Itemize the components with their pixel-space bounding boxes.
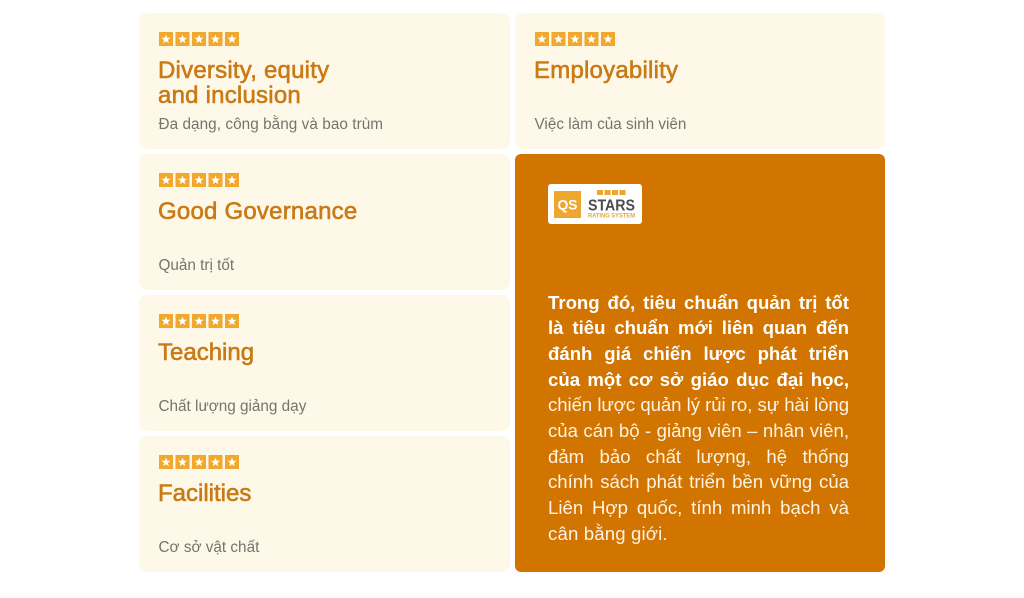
icon: five star rating bbox=[159, 314, 239, 328]
heading: and inclusion bbox=[158, 82, 301, 109]
text block: explanation paragraph: Trong đó, tiêu chuẩn quản trị tốt bbox=[548, 292, 849, 312]
text block: explanation paragraph: của cán bộ - giảng viên – nhân viên, bbox=[548, 420, 849, 441]
subtitle: Cơ sở vật chất bbox=[158, 539, 259, 556]
heading: Employability bbox=[534, 57, 678, 84]
icon: five star rating bbox=[159, 32, 239, 46]
icon: five star rating bbox=[535, 32, 615, 46]
logo: QS Stars Rating System: STARS bbox=[588, 198, 635, 214]
subtitle: Đa dạng, công bằng và bao trùm bbox=[158, 116, 383, 133]
heading: Teaching bbox=[158, 339, 254, 366]
panel: Diversity, equity and inclusion bbox=[139, 13, 510, 149]
panel: QS Stars explanation bbox=[515, 154, 885, 572]
panel: Employability bbox=[515, 13, 885, 149]
heading: Facilities bbox=[158, 480, 251, 507]
logo: QS Stars Rating System: RATING SYSTEM bbox=[588, 212, 635, 220]
text block: explanation paragraph: Liên Hợp quốc, tính minh bạch và bbox=[548, 497, 849, 518]
panel: Facilities bbox=[139, 436, 510, 572]
subtitle: Việc làm của sinh viên bbox=[534, 116, 686, 133]
icon: five star rating bbox=[159, 455, 239, 469]
subtitle: Quản trị tốt bbox=[158, 257, 234, 274]
heading: Good Governance bbox=[158, 198, 357, 225]
text block: explanation paragraph: của một cơ sở giáo dục đại học, bbox=[548, 369, 849, 390]
text block: explanation paragraph: chiến lược quản lý rủi ro, sự hài lòng bbox=[548, 394, 849, 415]
panel: Teaching bbox=[139, 295, 510, 431]
text block: explanation paragraph: đánh giá chiến lược phát triển bbox=[548, 343, 849, 364]
text block: explanation paragraph bbox=[548, 292, 849, 544]
icon: five star rating bbox=[159, 173, 239, 187]
text block: explanation paragraph: đảm bảo chất lượng, hệ thống bbox=[548, 446, 849, 467]
panel: Good Governance bbox=[139, 154, 510, 290]
text block: explanation paragraph: chính sách phát triển bền vững của bbox=[548, 471, 849, 492]
logo: QS Stars Rating System: QS bbox=[558, 196, 578, 212]
subtitle: Chất lượng giảng dạy bbox=[158, 398, 306, 415]
heading: Diversity, equity bbox=[158, 57, 329, 84]
text block: explanation paragraph: cân bằng giới. bbox=[548, 523, 668, 544]
logo: QS Stars Rating System bbox=[548, 184, 642, 224]
text block: explanation paragraph: là tiêu chuẩn mới liên quan đến bbox=[548, 317, 849, 338]
heading bbox=[158, 57, 330, 109]
